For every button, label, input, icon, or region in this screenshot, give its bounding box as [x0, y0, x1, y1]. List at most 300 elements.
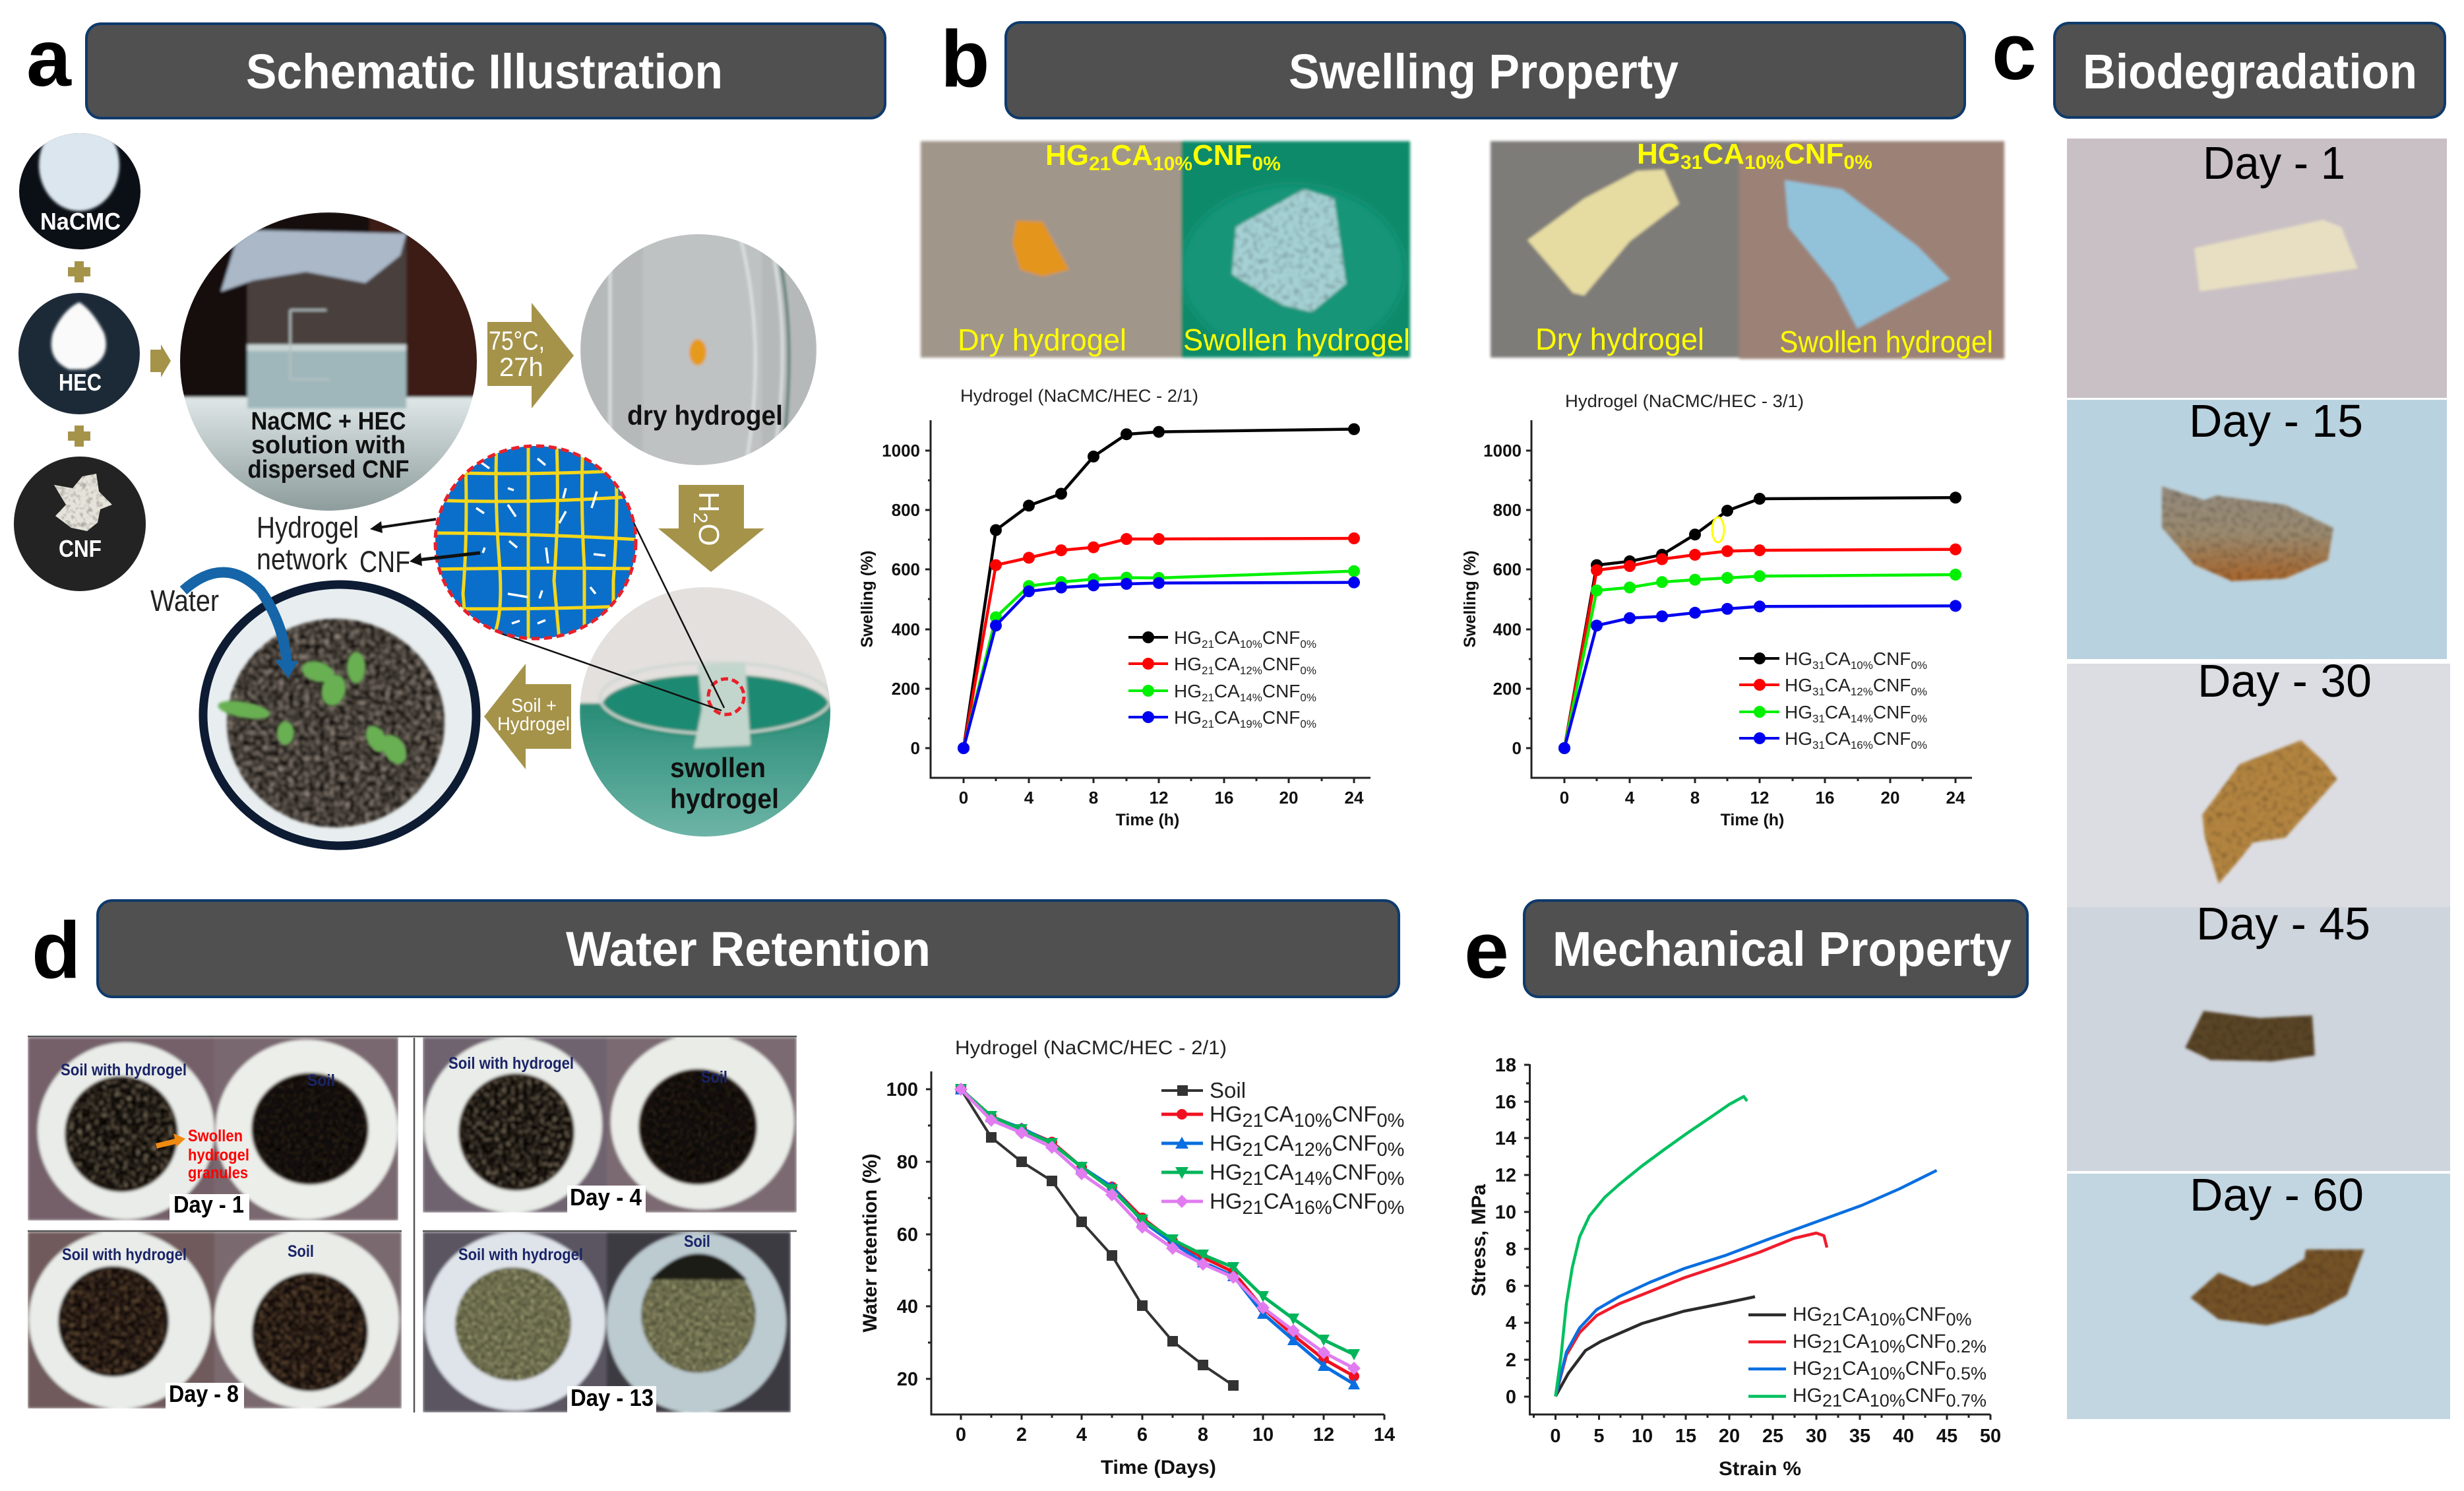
- legend: 21: [1243, 1139, 1264, 1160]
- panel letter b: b: [940, 14, 990, 104]
- arrow: 75°C, 27h: 27h: [499, 353, 543, 382]
- axis titles: [859, 1153, 1216, 1478]
- legend: HG: [1210, 1160, 1243, 1184]
- y tick labels: 0: [911, 738, 920, 758]
- legend: 21: [1243, 1168, 1264, 1190]
- icon: HEC powder: [18, 293, 140, 414]
- legend: CA: [1825, 649, 1851, 669]
- heading: Swelling Property: Swelling Property: [1289, 44, 1679, 99]
- legend: 0.2%: [1946, 1337, 1987, 1356]
- legend: CNF: [1873, 675, 1911, 695]
- x tick labels: 8: [1198, 1424, 1208, 1445]
- photo: day 45: Day - 45: [2196, 898, 2370, 949]
- y tick labels: 200: [892, 679, 920, 699]
- photo circle: potted plant: [203, 585, 476, 846]
- x tick labels: [959, 788, 1364, 808]
- legend: CA: [1264, 1189, 1294, 1213]
- legend: 10%: [1851, 659, 1873, 672]
- legend: CA: [1842, 1304, 1870, 1325]
- photo: soil plates day 13: Day - 13: [570, 1384, 654, 1411]
- arrow: Soil + Hydrogel: Soil +: [511, 695, 557, 716]
- legend: CA: [1825, 675, 1851, 695]
- legend: 21: [1822, 1310, 1842, 1329]
- legend: 14%: [1240, 691, 1262, 704]
- x tick labels: 4: [1076, 1424, 1087, 1445]
- x tick labels: 10: [1632, 1426, 1653, 1447]
- x tick labels: 0: [956, 1424, 966, 1445]
- y tick labels: 14: [1495, 1128, 1516, 1149]
- panel: swelling property: [858, 138, 2004, 829]
- legend: CA: [1825, 702, 1851, 722]
- y tick labels: 6: [1506, 1276, 1516, 1297]
- photo: soil plates day 13: [423, 1232, 791, 1413]
- panel letter a: a: [26, 13, 72, 103]
- panel letter d: d: [32, 905, 81, 995]
- x tick labels: 50: [1980, 1426, 2001, 1447]
- legend: 21: [1822, 1391, 1842, 1411]
- y tick labels: 800: [892, 500, 920, 520]
- line chart: swelling NaCMC/HEC 3/1: [1461, 391, 1972, 829]
- legend: 10%: [1870, 1391, 1905, 1411]
- x tick labels: 25: [1762, 1426, 1783, 1447]
- data series: [961, 1089, 1354, 1385]
- photo circle: beaker solution: NaCMC + HEC: [251, 408, 406, 435]
- legend: HG: [1793, 1358, 1822, 1380]
- legend: HG: [1785, 702, 1812, 722]
- axis titles: Time (h): [1721, 811, 1784, 829]
- legend: 19%: [1240, 718, 1262, 730]
- x tick labels: 2: [1016, 1424, 1027, 1445]
- x tick labels: 24: [1345, 788, 1364, 808]
- y tick labels: 60: [897, 1224, 918, 1246]
- arrow: 75°C, 27h: [487, 303, 574, 408]
- arrow: H2O: O: [693, 523, 725, 546]
- legend: 0%: [1376, 1168, 1404, 1190]
- photo: HG21 dry and swollen: CA: [1111, 139, 1153, 172]
- legend: CNF: [1873, 649, 1911, 669]
- photo circle: beaker solution: solution with: [251, 431, 406, 459]
- y tick labels: 0: [1506, 1387, 1516, 1408]
- y tick labels: 600: [892, 559, 920, 579]
- legend: 12%: [1851, 685, 1873, 698]
- legend: 16%: [1851, 739, 1873, 751]
- y tick labels: [1483, 441, 1522, 758]
- legend: HG: [1793, 1304, 1822, 1325]
- icon: CNF powder: CNF: [59, 535, 102, 562]
- legend: 0%: [1376, 1139, 1404, 1160]
- photo: HG21 dry and swollen: Swollen hydrogel: [1183, 323, 1410, 357]
- x tick labels: 12: [1313, 1424, 1334, 1445]
- chart title: Hydrogel (NaCMC/HEC - 3/1): [1565, 391, 1804, 411]
- photo circle: swollen hydrogel: swollen: [670, 752, 766, 783]
- x tick labels: 45: [1936, 1426, 1957, 1447]
- icon: plus: [68, 261, 90, 282]
- legend: 10%: [1294, 1110, 1332, 1131]
- photo: soil plates day 8: [28, 1230, 402, 1409]
- legend: 31: [1812, 659, 1825, 672]
- legend: 10%: [1870, 1364, 1905, 1383]
- legend: CA: [1214, 627, 1240, 648]
- photo: soil plates day 1: Day - 1: [173, 1191, 244, 1218]
- axis titles: [1461, 550, 1784, 829]
- legend: 31: [1812, 713, 1825, 725]
- legend: 21: [1202, 691, 1214, 704]
- legend: CNF: [1332, 1102, 1376, 1126]
- heading: Water Retention: Water Retention: [566, 922, 931, 976]
- legend: CA: [1842, 1385, 1870, 1407]
- photo: soil plates day 4: Soil: [701, 1068, 727, 1087]
- photo: HG31 dry and swollen: HG: [1637, 138, 1680, 170]
- x tick labels: 20: [1881, 788, 1899, 808]
- photo: HG31 dry and swollen: [1491, 138, 2004, 359]
- y tick labels: 600: [1493, 559, 1522, 579]
- panel letter e: e: [1464, 905, 1509, 995]
- data series: [1564, 497, 1956, 748]
- icon: NaCMC powder: [19, 133, 140, 249]
- legend: CNF: [1905, 1385, 1946, 1407]
- photo: soil plates day 1: Swollen: [188, 1127, 243, 1145]
- y tick labels: 2: [1506, 1350, 1516, 1371]
- legend: CA: [1214, 707, 1240, 728]
- legend: HG: [1174, 707, 1202, 728]
- legend: 21: [1202, 664, 1214, 677]
- x tick labels: [1550, 1426, 2001, 1447]
- axis titles: Stress, MPa: [1468, 1184, 1490, 1296]
- x tick labels: 20: [1279, 788, 1298, 808]
- x tick labels: 8: [1089, 788, 1098, 808]
- legend: CA: [1264, 1160, 1294, 1184]
- x tick labels: 30: [1806, 1426, 1827, 1447]
- y tick labels: 0: [1512, 738, 1522, 758]
- y tick labels: 16: [1495, 1092, 1516, 1113]
- yellow ellipse mark: [1712, 517, 1724, 542]
- legend: [1739, 649, 1927, 751]
- photo: HG31 dry and swollen: Swollen hydrogel: [1779, 325, 1993, 359]
- photo: HG21 dry and swollen: HG: [1045, 139, 1089, 172]
- legend: HG: [1174, 654, 1202, 674]
- heading: Schematic Illustration: [86, 24, 885, 118]
- legend: CA: [1214, 681, 1240, 701]
- legend: Soil: [1210, 1078, 1246, 1102]
- legend: 0%: [1300, 691, 1316, 704]
- axis titles: Swelling (%): [1461, 550, 1479, 648]
- legend: HG: [1793, 1385, 1822, 1407]
- photo: day 30: Day - 30: [2198, 655, 2372, 707]
- legend: 14%: [1294, 1168, 1332, 1190]
- axis titles: Time (h): [1116, 811, 1179, 829]
- callout lines to network: [501, 503, 724, 711]
- photo: day 60: Day - 60: [2190, 1169, 2364, 1221]
- photo circle: beaker solution: dispersed CNF: [248, 456, 409, 484]
- axes: [925, 420, 1371, 783]
- legend: CNF: [1262, 627, 1300, 648]
- legend: 21: [1822, 1364, 1842, 1383]
- legend: 10%: [1240, 638, 1262, 650]
- y tick labels: [1495, 1055, 1516, 1408]
- y tick labels: 1000: [1483, 441, 1522, 460]
- diagram: hydrogel network circle: [429, 442, 640, 640]
- photo: HG21 dry and swollen: 21: [1089, 153, 1111, 175]
- legend: CA: [1825, 728, 1851, 749]
- x tick labels: 6: [1137, 1424, 1148, 1445]
- legend: 0%: [1911, 685, 1927, 698]
- legend: 0%: [1946, 1310, 1971, 1329]
- photo: soil plates day 1: Soil: [307, 1071, 335, 1090]
- photo: HG31 dry and swollen: CA: [1702, 138, 1744, 170]
- legend: CNF: [1332, 1160, 1376, 1184]
- photo: HG31 dry and swollen: 10%: [1744, 152, 1784, 174]
- line chart: water retention: [859, 1037, 1404, 1478]
- legend: CNF: [1332, 1131, 1376, 1155]
- photo: day 60: [2067, 1169, 2450, 1419]
- legend: 12%: [1240, 664, 1262, 677]
- photo: HG21 dry and swollen: Dry hydrogel: [958, 323, 1126, 357]
- legend: HG: [1210, 1189, 1243, 1213]
- icon: NaCMC powder: NaCMC: [40, 208, 121, 235]
- legend: 0%: [1911, 739, 1927, 751]
- x tick labels: 24: [1946, 788, 1965, 808]
- y tick labels: 1000: [882, 441, 920, 460]
- axes: [926, 1071, 1384, 1420]
- x tick labels: 35: [1849, 1426, 1870, 1447]
- y tick labels: 18: [1495, 1055, 1516, 1076]
- legend: CNF: [1905, 1358, 1946, 1380]
- legend: [1128, 627, 1316, 730]
- photo circle: swollen hydrogel: hydrogel: [670, 783, 779, 814]
- photo: soil plates day 8: Soil: [288, 1242, 314, 1261]
- chart title: Hydrogel (NaCMC/HEC - 2/1): [955, 1037, 1227, 1059]
- photo: HG21 dry and swollen: [921, 139, 1410, 358]
- photo: day 15: Day - 15: [2189, 395, 2363, 447]
- legend: HG: [1785, 675, 1812, 695]
- label: CNF: CNF: [359, 545, 410, 579]
- dividers: [28, 1036, 797, 1412]
- photo: HG21 dry and swollen: 0%: [1252, 153, 1281, 175]
- photo circle: dry hydrogel: [579, 231, 818, 468]
- photo: soil plates day 1: [28, 1037, 398, 1221]
- y tick labels: 4: [1506, 1313, 1516, 1334]
- x tick labels: 5: [1593, 1426, 1605, 1447]
- legend: CNF: [1262, 681, 1300, 701]
- legend: CNF: [1905, 1331, 1946, 1352]
- x tick labels: 12: [1150, 788, 1168, 808]
- legend: HG: [1210, 1102, 1243, 1126]
- photo circle: dry hydrogel: dry hydrogel: [627, 400, 783, 431]
- photo: soil plates day 1: hydrogel: [188, 1146, 249, 1164]
- x tick labels: 20: [1719, 1426, 1740, 1447]
- legend: HG: [1785, 649, 1812, 669]
- photo: day 30: [2067, 655, 2450, 907]
- arrow: Soil + Hydrogel: [484, 664, 571, 769]
- axes: [1524, 1064, 1990, 1420]
- heading: Mechanical Property: [1524, 901, 2027, 997]
- legend: 0%: [1376, 1197, 1404, 1219]
- legend: HG: [1174, 627, 1202, 648]
- photo: soil plates day 13: Soil: [684, 1232, 710, 1251]
- line chart: swelling NaCMC/HEC 2/1: [858, 386, 1371, 829]
- heading: Biodegradation: [2054, 23, 2445, 117]
- legend: CA: [1214, 654, 1240, 674]
- y tick labels: 40: [897, 1296, 918, 1317]
- photo: soil plates day 4: Day - 4: [570, 1184, 642, 1211]
- x tick labels: 10: [1252, 1424, 1274, 1445]
- icon: HEC powder: HEC: [59, 369, 102, 396]
- photo: soil plates day 8: Soil with hydrogel: [62, 1246, 187, 1264]
- legend: 0%: [1300, 664, 1316, 677]
- photo circle: beaker solution: [178, 211, 481, 516]
- icon: water arrow: [183, 573, 298, 678]
- legend: 21: [1202, 718, 1214, 730]
- legend: 0%: [1911, 659, 1927, 672]
- x tick labels: 4: [1625, 788, 1635, 808]
- legend: CNF: [1873, 728, 1911, 749]
- photo: day 1: Day - 1: [2203, 137, 2345, 189]
- label: Hydrogel network: network: [257, 542, 348, 576]
- legend: 0%: [1300, 718, 1316, 730]
- legend: CNF: [1873, 702, 1911, 722]
- photo: HG31 dry and swollen: 31: [1680, 152, 1702, 174]
- legend: HG: [1210, 1131, 1243, 1155]
- arrow: Soil + Hydrogel: Hydrogel: [497, 714, 570, 735]
- photo: HG31 dry and swollen: Dry hydrogel: [1535, 322, 1704, 356]
- legend: CA: [1842, 1331, 1870, 1352]
- y tick labels: 8: [1506, 1239, 1516, 1260]
- heading: Schematic Illustration: Schematic Illustration: [246, 44, 723, 99]
- x tick labels: 0: [1560, 788, 1569, 808]
- chart title: Hydrogel (NaCMC/HEC - 2/1): [960, 386, 1198, 406]
- legend: 31: [1812, 739, 1825, 751]
- photo: soil plates day 13: Soil with hydrogel: [458, 1246, 583, 1264]
- x tick labels: 4: [1024, 788, 1034, 808]
- legend: [1748, 1304, 1987, 1411]
- icon: plus: [68, 426, 90, 447]
- photo: HG31 dry and swollen: CNF: [1784, 138, 1843, 170]
- photo: soil plates day 4: Soil with hydrogel: [448, 1054, 574, 1073]
- x tick labels: 16: [1215, 788, 1233, 808]
- legend: 0%: [1911, 713, 1927, 725]
- legend: 0%: [1300, 638, 1316, 650]
- heading: Water Retention: [98, 901, 1399, 997]
- legend: CNF: [1332, 1189, 1376, 1213]
- legend: 31: [1812, 685, 1825, 698]
- legend: 21: [1243, 1110, 1264, 1131]
- arrow: H2O: H: [693, 492, 725, 513]
- legend: CNF: [1262, 654, 1300, 674]
- axes: [1526, 420, 1972, 783]
- photo: day 15: [2067, 395, 2447, 659]
- legend: 12%: [1294, 1139, 1332, 1160]
- heading: Mechanical Property: Mechanical Property: [1553, 922, 2012, 976]
- x tick labels: 0: [959, 788, 968, 808]
- axis titles: Swelling (%): [858, 550, 877, 648]
- legend: [1161, 1078, 1404, 1219]
- photo: soil plates day 1: granules: [188, 1164, 248, 1182]
- axis titles: [858, 550, 1179, 829]
- photo: day 1: [2067, 137, 2447, 398]
- axis titles: Time (Days): [1101, 1457, 1216, 1478]
- legend: HG: [1793, 1331, 1822, 1352]
- x tick labels: 40: [1893, 1426, 1914, 1447]
- photo: soil plates day 4: [423, 1034, 797, 1213]
- legend: CNF: [1905, 1304, 1946, 1325]
- x tick labels: [1560, 788, 1965, 808]
- y tick labels: 400: [1493, 619, 1522, 639]
- x tick labels: 0: [1550, 1426, 1561, 1447]
- axis titles: Strain %: [1719, 1458, 1801, 1480]
- photo circle: swollen hydrogel: [579, 586, 832, 839]
- legend: CNF: [1262, 707, 1300, 728]
- y tick labels: 12: [1495, 1165, 1516, 1186]
- legend: HG: [1174, 681, 1202, 701]
- legend: CA: [1264, 1102, 1294, 1126]
- x tick labels: 12: [1750, 788, 1769, 808]
- arrow: to mixture: [150, 344, 171, 377]
- legend: 0.5%: [1946, 1364, 1987, 1383]
- photo: HG21 dry and swollen: 10%: [1153, 153, 1192, 175]
- legend: 16%: [1294, 1197, 1332, 1219]
- y tick labels: [886, 1079, 918, 1390]
- icon: CNF powder: [14, 457, 146, 591]
- legend: 21: [1202, 638, 1214, 650]
- legend: HG: [1785, 728, 1812, 749]
- photo: soil plates day 1: Soil with hydrogel: [61, 1061, 187, 1079]
- y tick labels: 10: [1495, 1202, 1516, 1223]
- data series: [964, 429, 1354, 748]
- panel: schematic illustration: [14, 119, 832, 846]
- legend: 21: [1822, 1337, 1842, 1356]
- x tick labels: 14: [1374, 1424, 1395, 1445]
- y tick labels: [882, 441, 920, 758]
- legend: 14%: [1851, 713, 1873, 725]
- panel: biodegradation: [2067, 137, 2450, 1419]
- heading: Swelling Property: [1006, 22, 1965, 118]
- x tick labels: 8: [1690, 788, 1700, 808]
- legend: 0%: [1376, 1110, 1404, 1131]
- y tick labels: 100: [886, 1079, 918, 1100]
- photo: HG21 dry and swollen: CNF: [1192, 139, 1252, 172]
- y tick labels: 20: [897, 1369, 918, 1390]
- panel: water retention: [28, 1034, 1404, 1478]
- label: Hydrogel network: [257, 511, 359, 576]
- y tick labels: 800: [1493, 500, 1522, 520]
- arrows: network callouts: [370, 519, 480, 566]
- x tick labels: [956, 1424, 1395, 1445]
- y tick labels: 80: [897, 1152, 918, 1173]
- label: Hydrogel network: Hydrogel: [257, 511, 359, 544]
- legend: 10%: [1870, 1337, 1905, 1356]
- arrow: H2O: [658, 485, 764, 572]
- panel letter c: c: [1992, 7, 2037, 96]
- stress-strain curves: [1555, 1096, 1936, 1396]
- arrow: H2O: 2: [689, 513, 711, 523]
- y tick labels: 200: [1493, 679, 1522, 699]
- axis titles: Water retention (%): [859, 1153, 881, 1333]
- legend: 0.7%: [1946, 1391, 1987, 1411]
- label: Water: Water: [150, 584, 219, 618]
- legend: CA: [1842, 1358, 1870, 1380]
- legend: CA: [1264, 1131, 1294, 1155]
- photo: HG31 dry and swollen: 0%: [1843, 152, 1872, 174]
- photo: day 45: [2067, 898, 2450, 1171]
- x tick labels: 15: [1675, 1426, 1696, 1447]
- heading: Biodegradation: Biodegradation: [2083, 44, 2417, 99]
- panel: mechanical property chart: [1468, 1055, 2001, 1480]
- x tick labels: 16: [1816, 788, 1834, 808]
- legend: 10%: [1870, 1310, 1905, 1329]
- legend: 21: [1243, 1197, 1264, 1219]
- arrow: 75°C, 27h: 75°C,: [489, 327, 545, 356]
- y tick labels: 400: [892, 619, 920, 639]
